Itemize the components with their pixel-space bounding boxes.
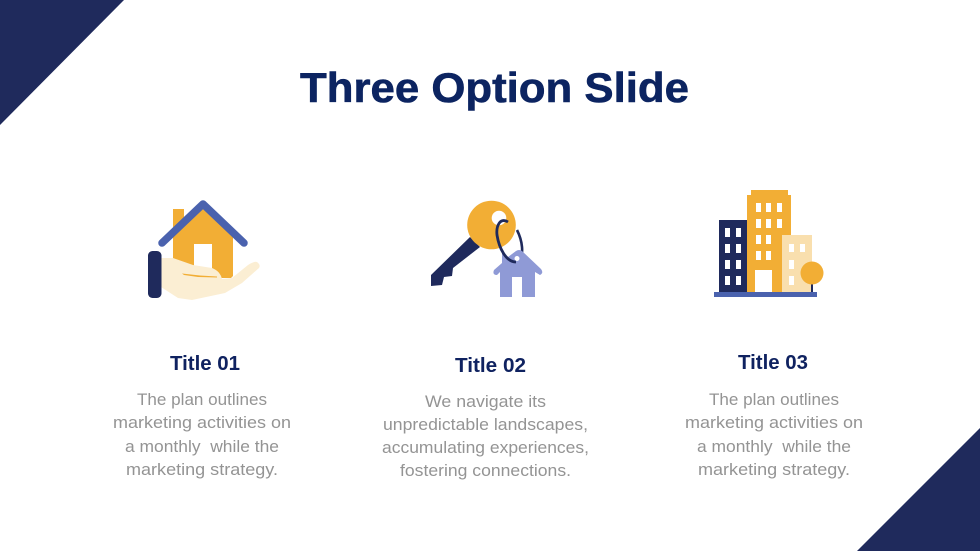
corner triangle: top left [0, 0, 124, 125]
heading: Title 02: Title 02 [455, 355, 526, 377]
heading: Title 03: Title 03 [738, 352, 808, 374]
text block: option 1: marketing strategy. [126, 461, 278, 479]
icon: city buildings [714, 190, 824, 297]
text block: option 3: a monthly while the [697, 438, 851, 456]
text block: option 1: The plan outlines [137, 391, 267, 409]
text block: option 2: accumulating experiences, [382, 439, 589, 457]
text block: option 3: The plan outlines [709, 391, 839, 409]
text block: option 2 [382, 393, 589, 480]
corner triangle: bottom right [857, 428, 980, 551]
text block: option 3: marketing strategy. [698, 461, 850, 479]
text block: option 1: a monthly while the [125, 438, 279, 456]
heading: Title 01: Title 01 [170, 353, 240, 375]
icon: key with house keychain [431, 201, 542, 297]
text block: option 2: fostering connections. [400, 462, 571, 480]
text block: option 3: marketing activities on [685, 414, 863, 432]
icon: house in hand [148, 204, 260, 300]
text block: option 2: We navigate its [425, 393, 546, 411]
text block: option 1: marketing activities on [113, 414, 291, 432]
text block: option 1 [113, 391, 291, 479]
text block: option 3 [685, 391, 863, 479]
text block: option 2: unpredictable landscapes, [383, 416, 588, 434]
title: Three Option Slide [300, 64, 689, 111]
